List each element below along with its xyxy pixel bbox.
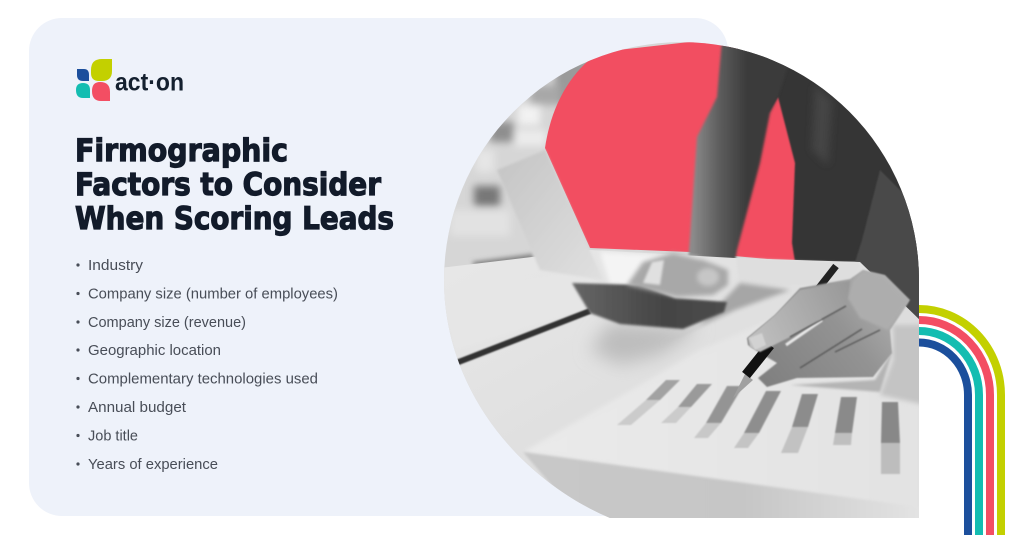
desk highlight behind calculator [600, 252, 700, 285]
laptop screen [498, 149, 592, 276]
folder edge [456, 311, 590, 363]
photo: hands working on a chart, greyscale with red backdrop [440, 38, 925, 530]
bullet: Company size revenue: Company size (revenue) [88, 314, 246, 331]
pen upper barrel [816, 264, 839, 286]
paper sheet [532, 353, 919, 506]
stripe: olive [919, 309, 1001, 535]
heading [75, 133, 394, 237]
index finger [748, 281, 850, 352]
icon: blue leaf [77, 69, 89, 81]
heading line 3: When Scoring Leads [75, 201, 394, 237]
bullet list of factors [76, 257, 338, 473]
hand shadow on paper [794, 354, 892, 393]
blurred desk clutter [470, 252, 534, 264]
rainbow stripes [919, 309, 1001, 535]
bullet: Complementary technologies: Complementary technologies used [88, 370, 318, 388]
stripe: blue [919, 342, 968, 535]
bullet: Company size employees: Company size (number of employees) [88, 286, 338, 302]
desk surface [444, 250, 919, 474]
writing hand [733, 266, 910, 398]
knuckle highlight [697, 268, 719, 286]
paper front edge [524, 452, 868, 518]
bullet: Annual budget: Annual budget [88, 399, 187, 416]
icon: olive leaf [91, 59, 112, 81]
far desk [735, 256, 835, 261]
bullet: Geographic location: Geographic location [88, 342, 221, 359]
bar 5 [792, 394, 818, 427]
bar 1 [646, 380, 680, 400]
torso fold highlight [812, 87, 832, 160]
calculator [572, 283, 727, 329]
stripe: red [919, 320, 990, 535]
finger creases [790, 306, 880, 368]
logo wordmark: act·on [115, 68, 184, 96]
bar 3 [706, 386, 743, 423]
pen nib [733, 374, 753, 398]
bar 7 [881, 402, 900, 443]
back of hand [848, 283, 908, 328]
icon: red leaf [92, 82, 110, 101]
panel: light blue background [29, 18, 728, 516]
sleeve [855, 171, 919, 319]
bullet: Job title: Job title [88, 428, 138, 444]
red backdrop [545, 38, 800, 262]
finger nail [749, 333, 766, 350]
heading line 1: Firmographic [75, 133, 288, 169]
forearm [688, 40, 790, 262]
bar 4 [744, 391, 781, 433]
dark torso [728, 46, 919, 279]
heading line 2: Factors to Consider [75, 167, 382, 203]
logo: act-on [76, 59, 184, 101]
bullet: Industry: Industry [88, 257, 144, 274]
calculator shadow [692, 281, 788, 330]
pale fingers on calculator [643, 260, 664, 285]
photo base [444, 42, 902, 476]
hand silhouette [747, 270, 910, 387]
desk large shadow [590, 322, 700, 365]
stripe: teal [919, 331, 979, 535]
icon: teal leaf [76, 83, 90, 98]
bar chart on paper [617, 380, 900, 474]
desk left paper brightness [445, 270, 600, 350]
pen reflection [786, 320, 822, 345]
bar 6 [835, 397, 857, 433]
blurred shelves background [450, 60, 595, 236]
blurred hand on calculator [627, 253, 728, 297]
bar 2 [678, 384, 712, 407]
pen grip [746, 345, 770, 375]
bullet: Years of experience: Years of experience [88, 456, 218, 473]
desk right shade [880, 324, 919, 405]
